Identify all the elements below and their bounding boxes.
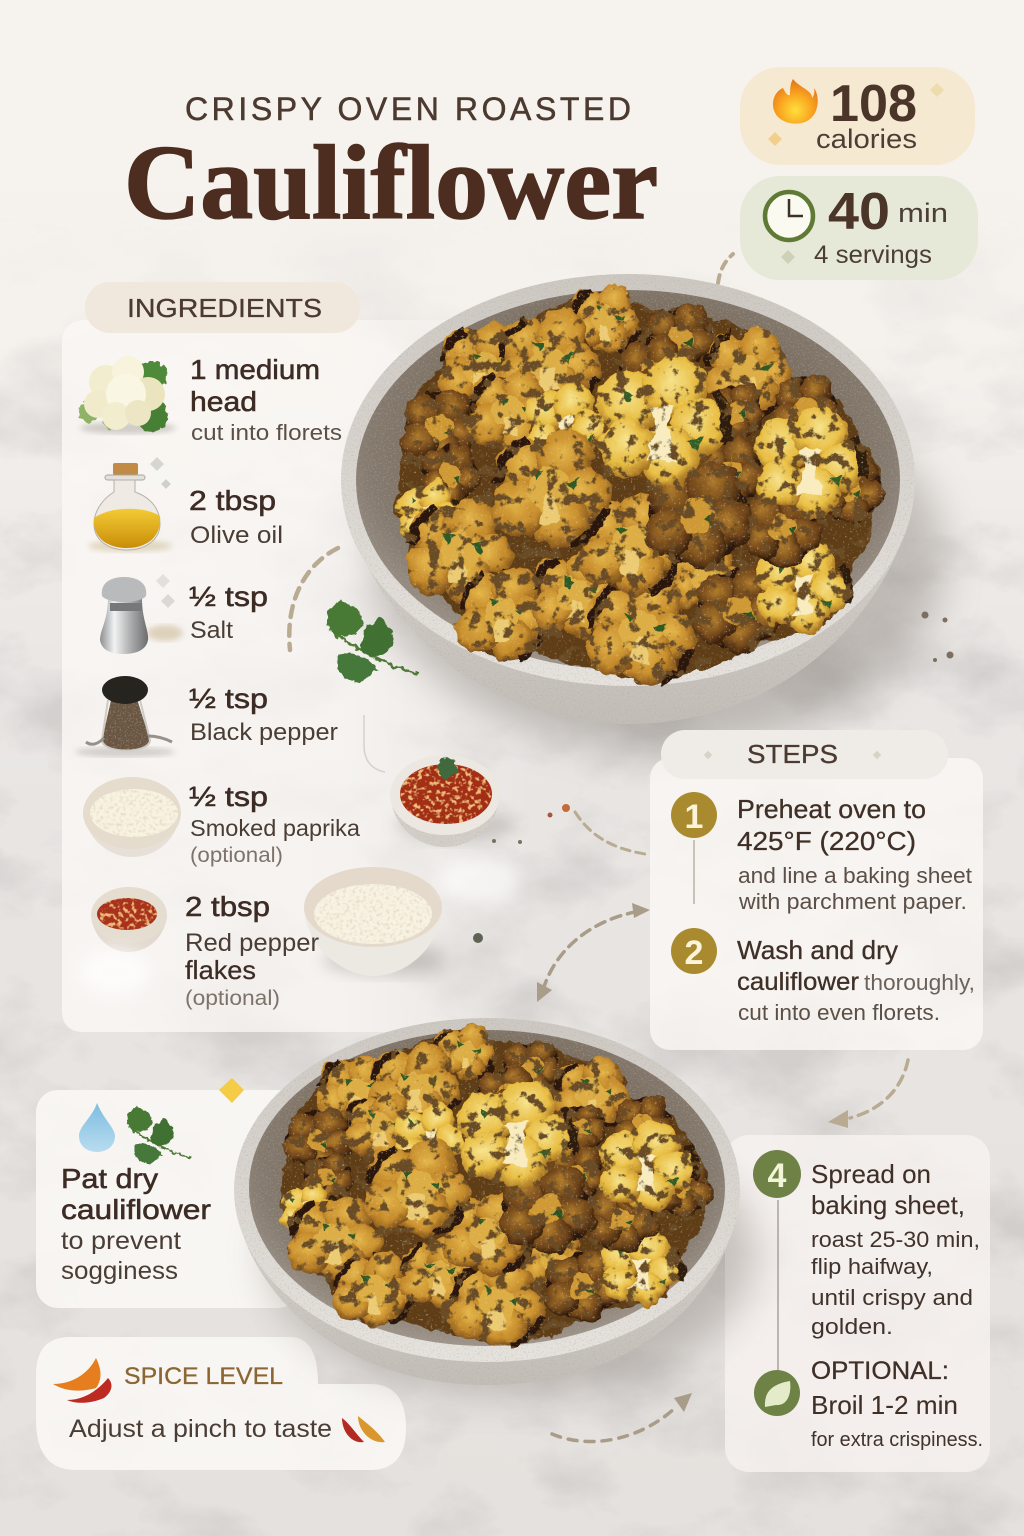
step 1: Preheat oven to bbox=[737, 794, 926, 824]
icon: flame bbox=[773, 79, 818, 124]
icon: olive oil bottle bbox=[88, 457, 172, 552]
ingredient: 2 tbsp olive oil: Olive oil bbox=[190, 522, 283, 549]
step 4: Spread on bbox=[811, 1159, 931, 1189]
text: pat dry: Pat dry bbox=[61, 1163, 158, 1194]
bowl 1 with roasted cauliflower bbox=[341, 274, 945, 750]
badge: calories: calories bbox=[816, 124, 917, 154]
large bowl of white flakes bbox=[304, 867, 447, 976]
text: pat dry bbox=[61, 1163, 211, 1285]
dashed arrow: bowl to calories bbox=[718, 254, 733, 283]
ingredient: 1/2 tsp smoked paprika: Smoked paprika bbox=[190, 815, 360, 841]
icon: yellow diamond bbox=[219, 1078, 244, 1103]
background marble bbox=[0, 371, 1024, 1536]
panel: steps bbox=[650, 730, 983, 1050]
ingredient: 1/2 tsp black pepper: ½ tsp bbox=[189, 683, 268, 714]
ingredient: 1/2 tsp salt: Salt bbox=[190, 617, 233, 644]
ingredient: 2 tbsp red pepper flakes: flakes bbox=[185, 955, 256, 985]
ingredient: 1/2 tsp salt: ½ tsp bbox=[189, 581, 268, 612]
icon: small chilies bbox=[342, 1416, 385, 1442]
step 2: Wash and dry bbox=[737, 935, 898, 965]
ingredient: 2 tbsp red pepper flakes: (optional) bbox=[185, 987, 280, 1010]
ingredient: 1 medium head: cut into florets bbox=[191, 420, 342, 445]
step 2: thoroughly, bbox=[864, 970, 975, 995]
bowl 2 with roasted cauliflower bbox=[234, 1018, 755, 1395]
heading pill: steps bbox=[661, 730, 948, 779]
step 1: 1 bbox=[685, 798, 703, 836]
text: pat dry: to prevent bbox=[61, 1227, 181, 1255]
ingredient: 1 medium head: head bbox=[190, 386, 257, 417]
heading pill: steps: STEPS bbox=[747, 739, 838, 769]
subtitle: CRISPY OVEN ROASTED bbox=[185, 91, 631, 127]
heading: spice level: SPICE LEVEL bbox=[124, 1363, 283, 1390]
step 2: 2 bbox=[685, 934, 703, 972]
icon: salt shaker bbox=[100, 574, 183, 654]
text: pat dry: sogginess bbox=[61, 1257, 178, 1285]
main title: Cauliflower bbox=[124, 124, 658, 241]
icon: bowl of white flakes bbox=[83, 777, 181, 857]
food: florets bbox=[278, 1023, 713, 1348]
text: pat dry: cauliflower bbox=[61, 1194, 211, 1225]
badge: calories bbox=[740, 67, 975, 165]
icon: cauliflower head bbox=[78, 356, 176, 434]
step 4: roast 25-30 min, bbox=[811, 1227, 980, 1252]
step 2: cut into even florets. bbox=[738, 1000, 940, 1025]
badge: time and servings: 40 bbox=[828, 183, 890, 241]
optional step with leaf icon: Broil 1-2 min bbox=[811, 1390, 958, 1420]
ingredient: 2 tbsp red pepper flakes: Red pepper bbox=[185, 929, 319, 957]
dashed arrow: ingredient curve bbox=[289, 548, 338, 650]
step 1: with parchment paper. bbox=[738, 889, 967, 914]
ingredient: 2 tbsp olive oil bbox=[189, 485, 283, 549]
icon: small bowl of red flakes bbox=[91, 887, 167, 952]
salt scatter bbox=[79, 948, 151, 996]
step 4: flip haifway, bbox=[811, 1254, 933, 1279]
dashed arrow: bottom curve bbox=[552, 1393, 692, 1442]
optional step with leaf icon: OPTIONAL: bbox=[811, 1357, 949, 1385]
step 4: baking sheet, bbox=[811, 1190, 965, 1220]
ingredient: 1/2 tsp black pepper bbox=[189, 683, 338, 746]
parsley sprig bbox=[327, 600, 418, 683]
ingredient: 2 tbsp red pepper flakes: 2 tbsp bbox=[185, 891, 270, 922]
step 4 bbox=[753, 1150, 980, 1339]
step 2: cauliflower bbox=[737, 968, 859, 996]
food: florets bbox=[395, 284, 884, 686]
icon: parsley bbox=[127, 1106, 191, 1164]
step 4: 4 bbox=[768, 1157, 787, 1195]
ingredient: 1/2 tsp smoked paprika bbox=[189, 781, 360, 867]
badge: time and servings: min bbox=[898, 198, 948, 228]
icon: chili peppers bbox=[53, 1358, 111, 1403]
text: adjust: Adjust a pinch to taste bbox=[69, 1415, 332, 1443]
ingredient: 1 medium head: 1 medium bbox=[190, 354, 320, 385]
panel: spice level bbox=[36, 1337, 406, 1470]
optional step with leaf icon bbox=[754, 1357, 983, 1451]
optional step with leaf icon: for extra crispiness. bbox=[811, 1429, 983, 1451]
step 4: golden. bbox=[811, 1314, 893, 1339]
panel: step 4 and optional bbox=[725, 1135, 990, 1472]
step 1: 425°F (220°C) bbox=[737, 826, 916, 856]
icon: clock bbox=[765, 192, 813, 240]
dashed double arrow between steps and bowl bbox=[537, 903, 650, 1002]
heading pill: ingredients bbox=[85, 282, 360, 333]
heading pill: ingredients: INGREDIENTS bbox=[127, 293, 322, 323]
ingredient: 1/2 tsp smoked paprika: (optional) bbox=[190, 844, 283, 867]
crumbs scatter bbox=[440, 612, 954, 943]
panel: ingredients bbox=[62, 282, 530, 1032]
connector line bbox=[777, 1200, 779, 1370]
icon: pepper jar bbox=[75, 676, 175, 757]
title block bbox=[124, 91, 658, 241]
step 4: until crispy and bbox=[811, 1285, 973, 1310]
ingredient: 1/2 tsp salt bbox=[189, 581, 268, 644]
badge: calories: 108 bbox=[830, 75, 917, 133]
chili flakes bowl bbox=[390, 755, 515, 847]
dashed arrow: step 2 to step 4 bbox=[828, 1060, 908, 1128]
step 1 bbox=[671, 792, 972, 914]
panel: pat dry tip bbox=[36, 1090, 300, 1308]
step 1: and line a baking sheet bbox=[738, 863, 972, 888]
badge: time and servings bbox=[740, 176, 978, 280]
badge: time and servings: 4 servings bbox=[814, 241, 932, 269]
ingredient: 2 tbsp olive oil: 2 tbsp bbox=[189, 485, 276, 516]
dashed arrow: flakes to steps bbox=[575, 812, 645, 854]
step 2 bbox=[671, 928, 975, 1025]
icon: water drop bbox=[79, 1103, 115, 1152]
ingredient: 2 tbsp red pepper flakes bbox=[185, 891, 319, 1010]
ingredient: 1 medium head bbox=[190, 354, 342, 445]
ingredient: 1/2 tsp black pepper: Black pepper bbox=[190, 719, 338, 746]
ingredient: 1/2 tsp smoked paprika: ½ tsp bbox=[189, 781, 268, 812]
